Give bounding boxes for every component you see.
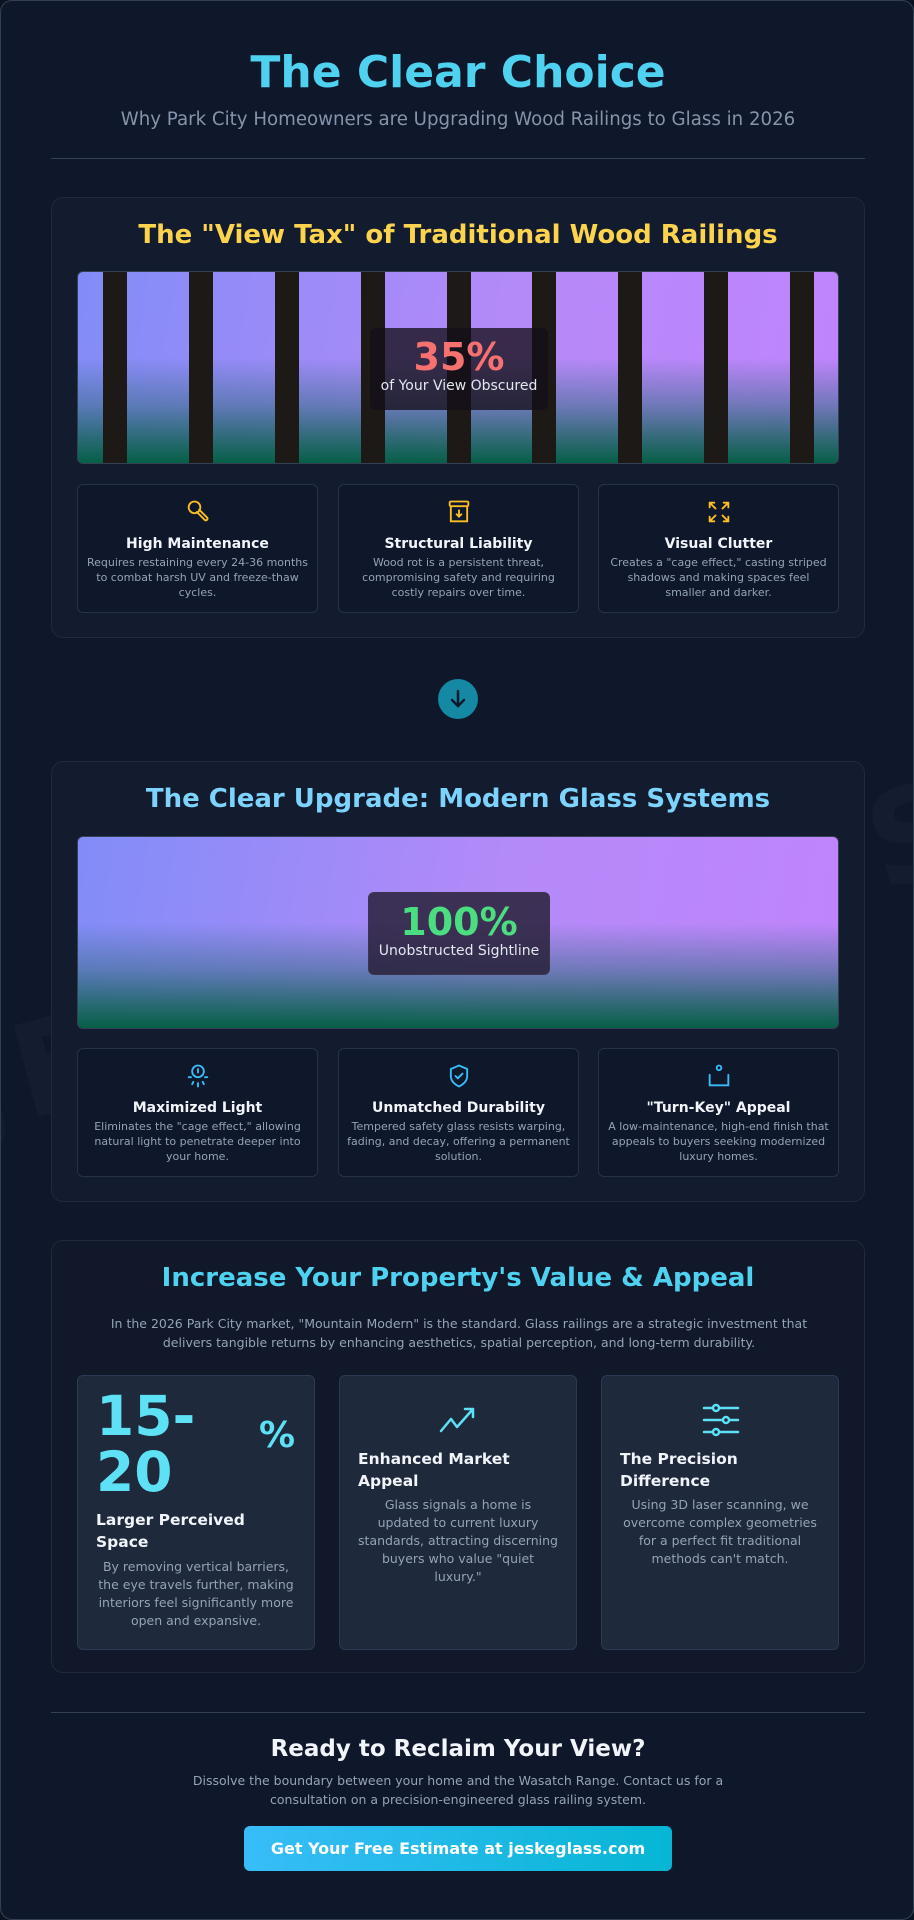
card: precision: Using 3D laser scanning, we overcome complex geometries for a perfect fit traditional methods can't match. [623, 1497, 817, 1566]
card: structural liability [338, 484, 579, 613]
card: visual clutter: Visual Clutter [665, 536, 772, 552]
card: precision: The Precision [620, 1450, 738, 1468]
card: high maintenance [77, 484, 318, 613]
heading: increase value: Increase Your Property's Value & Appeal [162, 1263, 754, 1293]
card: durability: Tempered safety glass resists warping, fading, and decay, offering a permanent solution. [347, 1120, 570, 1163]
icon: shield [450, 1064, 468, 1088]
icon: arrows [708, 502, 730, 522]
panel: glass systems [51, 761, 865, 1202]
button: estimate [244, 1826, 672, 1871]
card: market appeal: Appeal [358, 1472, 418, 1490]
panel: property value [51, 1240, 865, 1673]
card: maximized light: Eliminates the "cage effect," allowing natural light to penetrate deeper into your home. [94, 1120, 301, 1163]
stat: 15-20% [96, 1384, 295, 1504]
card: perceived space: Space [96, 1533, 148, 1551]
card: market appeal [339, 1375, 577, 1650]
card: structural liability: Wood rot is a persistent threat, compromising safety and requiring costly repairs over time. [362, 556, 555, 599]
heading: clear upgrade: The Clear Upgrade: Modern Glass Systems [146, 784, 770, 814]
text: intro: In the 2026 Park City market, "Mountain Modern" is the standard. Glass railings are a strategic investment that delivers tangible returns by enhancing aesthetics, spatial perception, and long-term durability. [111, 1316, 807, 1350]
stat: 15-20%: 15- [96, 1384, 195, 1448]
card: market appeal: Enhanced Market [358, 1450, 510, 1468]
card: turn-key: A low-maintenance, high-end finish that appeals to buyers seeking modernized luxury homes. [608, 1120, 829, 1163]
card: turn-key: "Turn-Key" Appeal [647, 1100, 790, 1116]
icon: bulb [188, 1064, 208, 1088]
icon: sliders [702, 1404, 740, 1436]
callout: 35% [370, 328, 548, 410]
icon: wrench [188, 500, 208, 522]
stat: 15-20%: % [259, 1415, 295, 1456]
card: structural liability: Structural Liability [384, 536, 533, 552]
card: maximized light: Maximized Light [133, 1100, 262, 1116]
card: perceived space: By removing vertical barriers, the eye travels further, making interiors feel significantly more open and expansive. [98, 1559, 294, 1628]
arrow: down [438, 679, 478, 719]
chart: glass view [77, 836, 839, 1029]
card: precision [601, 1375, 839, 1650]
card: precision: Difference [620, 1472, 710, 1490]
button: estimate: Get Your Free Estimate at jeskeglass.com [271, 1839, 645, 1858]
card: visual clutter [598, 484, 839, 613]
heading: view tax: The "View Tax" of Traditional Wood Railings [138, 220, 778, 250]
text: cta: Dissolve the boundary between your home and the Wasatch Range. Contact us for a consultation on a precision-engineered glass railing system. [193, 1773, 723, 1807]
callout: 100%: Unobstructed Sightline [379, 943, 539, 959]
subtitle: Why Park City Homeowners are Upgrading Wood Railings to Glass in 2026 [121, 109, 795, 130]
callout: 35%: 35% [414, 335, 504, 379]
callout: 100%: 100% [400, 900, 518, 944]
card: perceived space [77, 1375, 315, 1650]
title: The Clear Choice [250, 47, 666, 98]
icon: trend [440, 1408, 474, 1432]
panel: wood railings [51, 197, 865, 638]
card: durability [338, 1048, 579, 1177]
card: high maintenance: Requires restaining every 24-36 months to combat harsh UV and freeze-thaw cycles. [87, 556, 308, 599]
card: high maintenance: High Maintenance [126, 536, 269, 552]
heading: cta: Ready to Reclaim Your View? [271, 1736, 645, 1762]
card: visual clutter: Creates a "cage effect," casting striped shadows and making spaces feel smaller and darker. [610, 556, 827, 599]
card: maximized light [77, 1048, 318, 1177]
callout: 35%: of Your View Obscured [381, 378, 537, 394]
chart: railing view [77, 271, 839, 464]
card: durability: Unmatched Durability [372, 1100, 545, 1116]
stat: 15-20%: 20 [96, 1440, 173, 1504]
icon: bag [708, 1064, 730, 1086]
card: turn-key [598, 1048, 839, 1177]
card: perceived space: Larger Perceived [96, 1511, 245, 1529]
callout: 100% [368, 892, 550, 975]
card: market appeal: Glass signals a home is updated to current luxury standards, attracting discerning buyers who value "quiet luxury." [358, 1497, 558, 1584]
icon: box [448, 500, 470, 522]
